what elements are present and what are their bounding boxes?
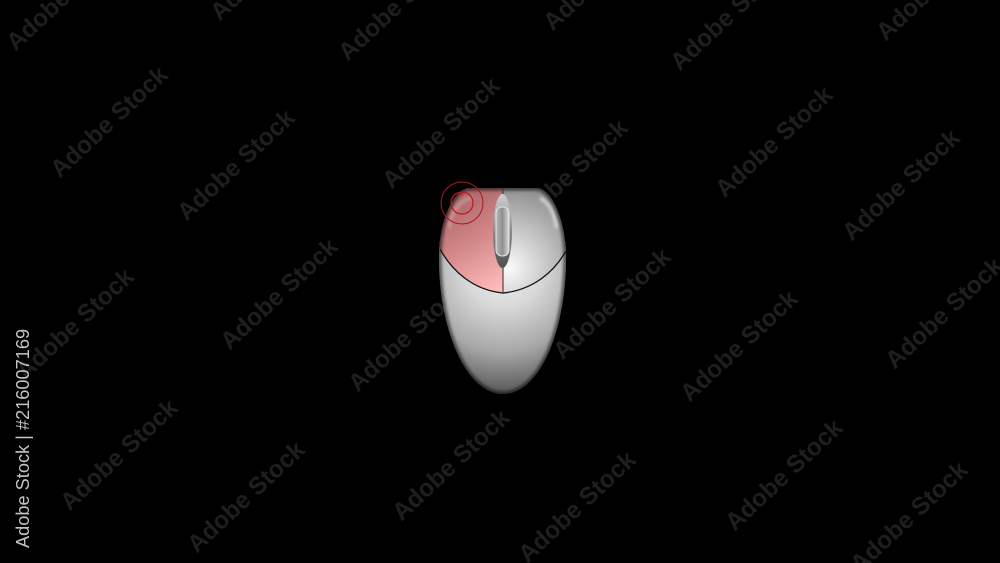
watermark pattern: Adobe Stock xyxy=(11,263,140,385)
stock id label: Adobe Stock | #216007169 xyxy=(13,329,33,548)
scroll wheel well xyxy=(493,194,512,268)
mouse lower body xyxy=(436,240,570,396)
watermark pattern: Adobe Stock xyxy=(343,275,472,397)
watermark pattern: Adobe Stock xyxy=(215,233,344,355)
watermark pattern: Adobe Stock xyxy=(55,394,184,516)
watermark pattern: Adobe Stock xyxy=(505,114,634,236)
click ripple outer ring xyxy=(441,182,483,224)
watermark pattern: Adobe Stock xyxy=(548,243,677,365)
icon: computer mouse xyxy=(436,182,570,396)
body edge shading xyxy=(439,188,566,394)
watermark pattern: Adobe Stock xyxy=(182,436,311,558)
right button grey xyxy=(504,188,566,280)
click ripple inner ring xyxy=(451,192,473,214)
watermark pattern: Adobe Stock xyxy=(837,124,966,246)
button highlights xyxy=(449,198,472,228)
watermark pattern: Adobe Stock xyxy=(720,414,849,536)
watermark pattern: Adobe Stock xyxy=(377,72,506,194)
scroll wheel xyxy=(496,207,509,256)
watermark pattern: Adobe Stock xyxy=(45,61,174,183)
watermark pattern: Adobe Stock xyxy=(387,404,516,526)
watermark pattern: Adobe Stock xyxy=(710,81,839,203)
left button highlighted red xyxy=(439,188,503,293)
button seam lines xyxy=(440,249,566,293)
watermark pattern: Adobe Stock xyxy=(172,104,301,226)
watermark pattern: Adobe Stock xyxy=(675,285,804,407)
